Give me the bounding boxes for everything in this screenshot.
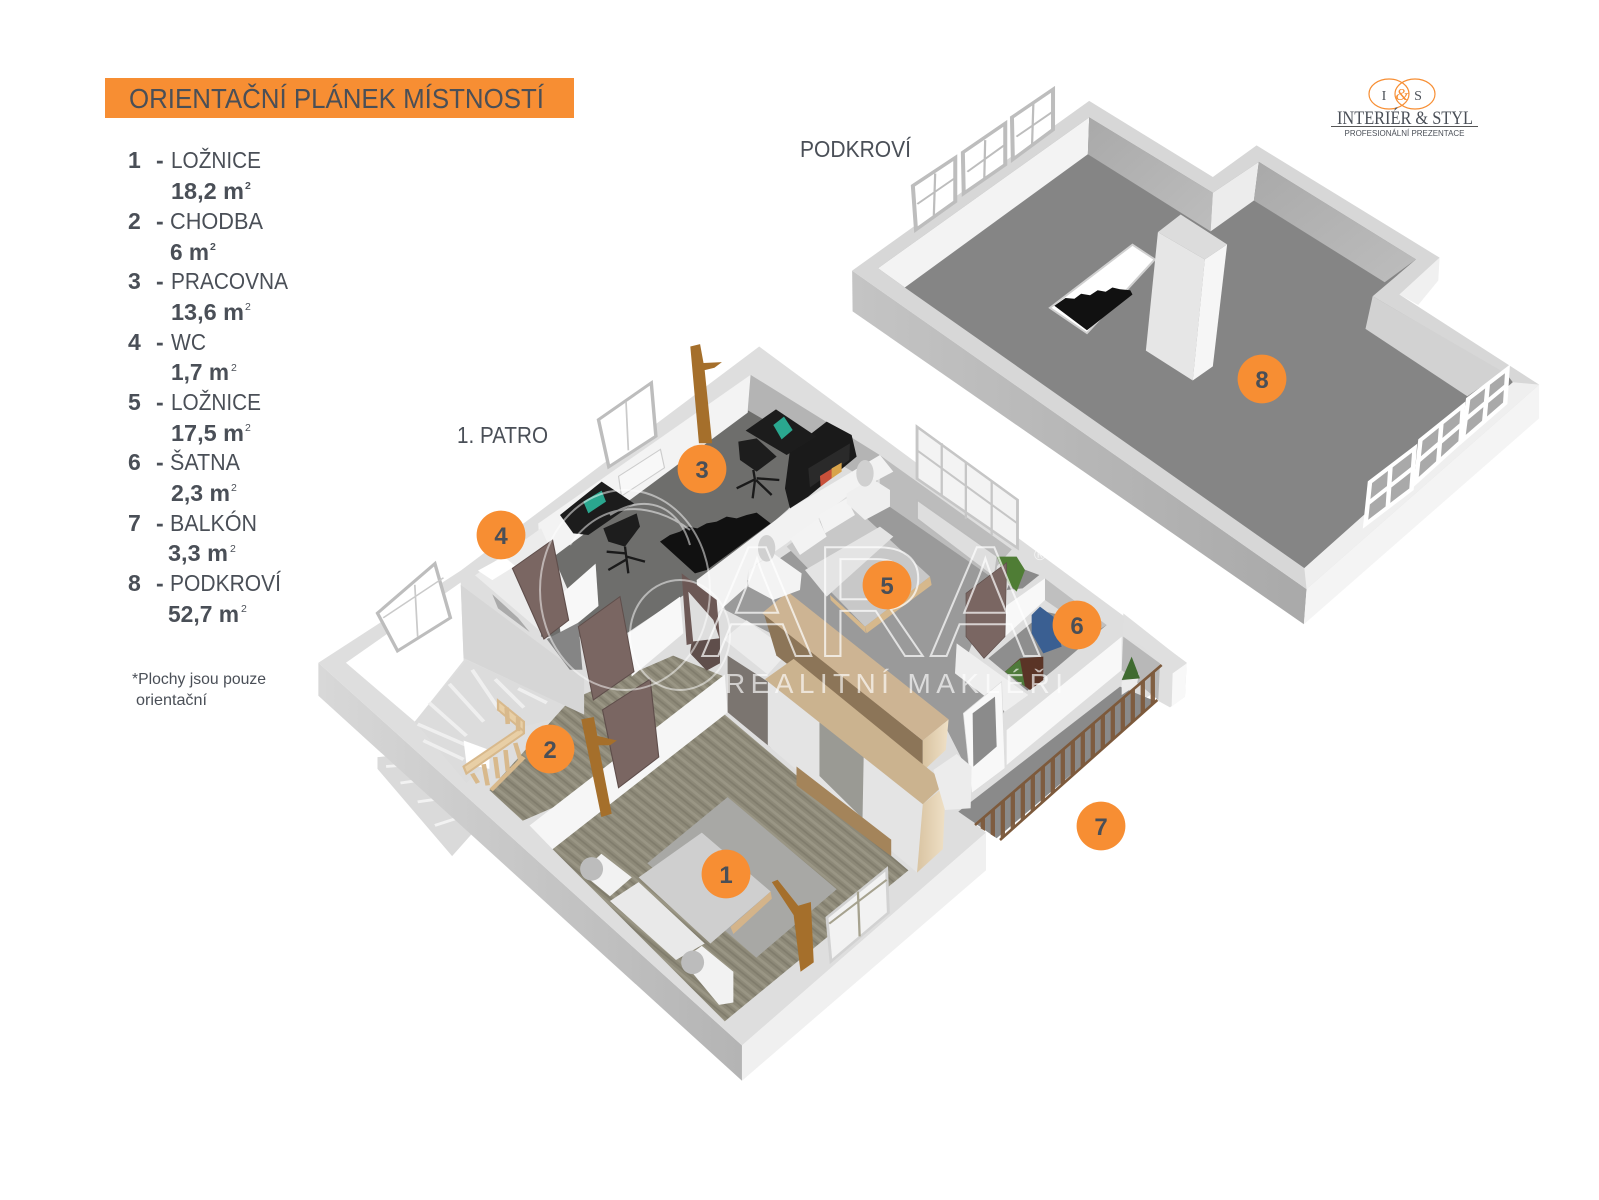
legend row 2: CHODBA <box>170 208 264 234</box>
watermark: ARA realitní makléři: ARA <box>702 514 1041 690</box>
chimney <box>1146 215 1227 380</box>
wall in front of dressing room <box>955 623 1122 765</box>
bookcase <box>785 422 857 508</box>
stairwell void <box>346 582 464 722</box>
timber beam bedroom <box>772 880 814 972</box>
room legend <box>128 147 289 627</box>
open door frame <box>682 573 720 671</box>
small closet floor <box>1007 567 1039 590</box>
bed in bedroom 1 <box>610 833 772 960</box>
room marker 6: 6 <box>1070 613 1084 640</box>
legend row 6: - <box>156 449 164 475</box>
logo: Interiér & Styl: INTERIÉR & STYL <box>1337 107 1473 129</box>
room marker 3 <box>678 445 726 493</box>
watermark: ARA realitní makléři: REALITNÍ MAKLÉŘI <box>725 668 1063 699</box>
legend row 8: - <box>156 570 164 596</box>
room marker 1 <box>702 850 750 898</box>
legend row 4 <box>128 329 237 385</box>
monitor front <box>583 491 606 513</box>
logo: Interiér & Styl: I <box>1382 89 1387 104</box>
room marker 8 <box>1238 355 1286 403</box>
legend row 2: 2 <box>210 241 216 253</box>
logo: Interiér & Styl <box>1331 79 1478 138</box>
timber beam centre <box>581 717 617 817</box>
legend row 7: - <box>156 510 164 536</box>
legend row 2: - <box>156 208 164 234</box>
attic floor <box>878 117 1513 568</box>
legend row 8: 2 <box>241 603 247 615</box>
outside stairs <box>377 755 475 856</box>
legend row 5 <box>128 389 261 446</box>
legend row 7: 3,3 m <box>168 540 228 566</box>
floor label: podkroví: PODKROVÍ <box>800 136 912 162</box>
house exterior faces <box>318 663 986 1081</box>
logo: Interiér & Styl: S <box>1414 89 1422 104</box>
balcony door <box>963 682 1005 793</box>
watermark: ARA realitní makléři <box>540 490 1063 699</box>
chair rear <box>737 438 779 498</box>
first floor plan: 1. patro <box>318 344 1187 1081</box>
step block <box>933 754 972 810</box>
legend row 6: 2 <box>231 482 237 494</box>
end wall cap <box>1122 613 1187 707</box>
room marker 3: 3 <box>695 457 709 484</box>
balcony railing <box>975 665 1162 840</box>
room marker 7 <box>1077 802 1125 850</box>
timber beam top <box>690 344 722 443</box>
title banner: ORIENTAČNÍ PLÁNEK MÍSTNOSTÍ <box>129 83 544 114</box>
chair front <box>603 513 645 573</box>
upper cabinet <box>762 592 949 771</box>
legend row 3: 2 <box>245 301 251 313</box>
window study <box>598 383 664 496</box>
desk front <box>560 482 634 535</box>
bedroom 1 wood floor <box>553 715 908 1021</box>
legend row 3: - <box>156 268 164 294</box>
legend row 5: 2 <box>245 422 251 434</box>
legend row 6: 2,3 m <box>171 480 230 506</box>
legend row 3 <box>128 268 289 325</box>
legend row 4: WC <box>171 329 206 355</box>
desk rear <box>746 409 817 455</box>
white side partition <box>555 564 598 637</box>
legend row 3: 3 <box>128 268 141 294</box>
bedroom 5 floor <box>713 490 1006 778</box>
window upper left wall <box>377 564 450 651</box>
legend row 8 <box>128 570 282 627</box>
bedroom 5 window and radiator <box>917 427 1018 578</box>
legend row 2: 6 m <box>170 239 209 265</box>
hall white wall <box>628 597 683 677</box>
room marker 7: 7 <box>1094 814 1108 841</box>
front right wall top <box>1304 382 1539 589</box>
exterior wall faces <box>852 258 1539 624</box>
legend row 1: 18,2 m <box>171 178 244 204</box>
legend row 1: LOŽNICE <box>171 147 261 173</box>
room marker 8: 8 <box>1255 367 1269 394</box>
legend row 3: PRACOVNA <box>171 268 289 294</box>
legend row 5: 5 <box>128 389 141 415</box>
study concrete floor <box>541 410 851 637</box>
legend row 8: 8 <box>128 570 141 596</box>
attic floor plan: podkroví <box>852 89 1539 624</box>
legend row 4: 1,7 m <box>171 359 229 385</box>
legend row 4: 4 <box>128 329 141 355</box>
legend row 2 <box>128 208 264 265</box>
room marker 1: 1 <box>719 862 733 889</box>
wall tops <box>852 101 1539 589</box>
study back walls <box>538 375 880 566</box>
legend row 8: PODKROVÍ <box>170 570 282 596</box>
room marker 4: 4 <box>494 523 508 550</box>
spiral staircase <box>415 660 581 783</box>
legend row 4: - <box>156 329 164 355</box>
legend row 6 <box>128 448 241 506</box>
house wall tops <box>318 347 1187 1045</box>
monitor rear <box>773 417 793 439</box>
legend row 4: 2 <box>231 362 237 374</box>
balcony plant <box>1122 657 1140 695</box>
attic windows, left wall <box>913 89 1053 230</box>
white dressing partition <box>1005 578 1045 637</box>
window bedroom 1 <box>827 869 888 961</box>
clothes <box>1005 607 1062 690</box>
partition study to bedroom 5 <box>697 455 893 613</box>
logo: Interiér & Styl: PROFESIONÁLNÍ PREZENTACE <box>1344 128 1465 138</box>
bed 5 <box>787 498 932 633</box>
nightstands bedroom 1 <box>580 854 733 1005</box>
legend row 2: 2 <box>128 208 141 234</box>
legend row 6: ŠATNA <box>170 448 241 475</box>
WC block <box>461 528 584 715</box>
hall wood floor <box>489 656 725 821</box>
legend row 5: - <box>156 389 164 415</box>
legend row 1 <box>128 147 261 204</box>
doors <box>512 540 659 788</box>
stair opening study <box>660 513 771 573</box>
room marker 2: 2 <box>543 737 557 764</box>
legend row 1: - <box>156 147 164 173</box>
legend row 7: 2 <box>230 543 236 555</box>
bedroom 5 back wall <box>880 455 1012 575</box>
room marker 6 <box>1053 601 1101 649</box>
wall between hall and bedroom 1 <box>530 674 728 849</box>
door bedroom 5 <box>966 563 1007 658</box>
attic windows, right wall <box>1366 369 1507 524</box>
door B <box>578 597 634 700</box>
legend row 1: 1 <box>128 147 141 173</box>
logo: Interiér & Styl: & <box>1395 85 1409 104</box>
footnote: *Plochy jsou pouze <box>132 671 266 688</box>
footnote <box>132 671 266 709</box>
room marker 5: 5 <box>880 573 894 600</box>
stair opening <box>1050 245 1155 333</box>
watermark: ARA realitní makléři: ® <box>1034 547 1046 564</box>
small grey floor <box>547 623 582 670</box>
legend row 8: 52,7 m <box>168 601 239 627</box>
plant by door <box>997 557 1025 592</box>
balcony floor strip <box>958 687 1157 838</box>
room marker 2 <box>526 725 574 773</box>
room marker 5 <box>863 561 911 609</box>
study and bedroom 5 furniture <box>560 409 932 700</box>
legend row 3: 13,6 m <box>171 299 244 325</box>
balcony, dressing room and door details <box>933 557 1187 840</box>
interior wall faces <box>878 117 1503 396</box>
legend row 7 <box>128 510 257 566</box>
rug <box>647 797 837 958</box>
room marker 4 <box>477 511 525 559</box>
wooden railing at stairs <box>464 700 524 790</box>
central white box <box>724 620 789 674</box>
legend row 7: BALKÓN <box>170 510 257 536</box>
nightstands bedroom 5 <box>748 460 890 600</box>
legend row 1: 2 <box>245 180 251 192</box>
dressing room wall <box>1045 578 1107 633</box>
legend row 5: 17,5 m <box>171 420 244 446</box>
legend row 5: LOŽNICE <box>171 389 261 415</box>
floor label: 1. patro: 1. PATRO <box>457 422 548 448</box>
legend row 7: 7 <box>128 510 141 536</box>
dark wall by wardrobe <box>728 656 771 748</box>
footnote: orientační <box>136 692 208 709</box>
legend row 6: 6 <box>128 449 141 475</box>
wardrobe <box>765 659 946 873</box>
dressing room floor <box>988 612 1107 692</box>
